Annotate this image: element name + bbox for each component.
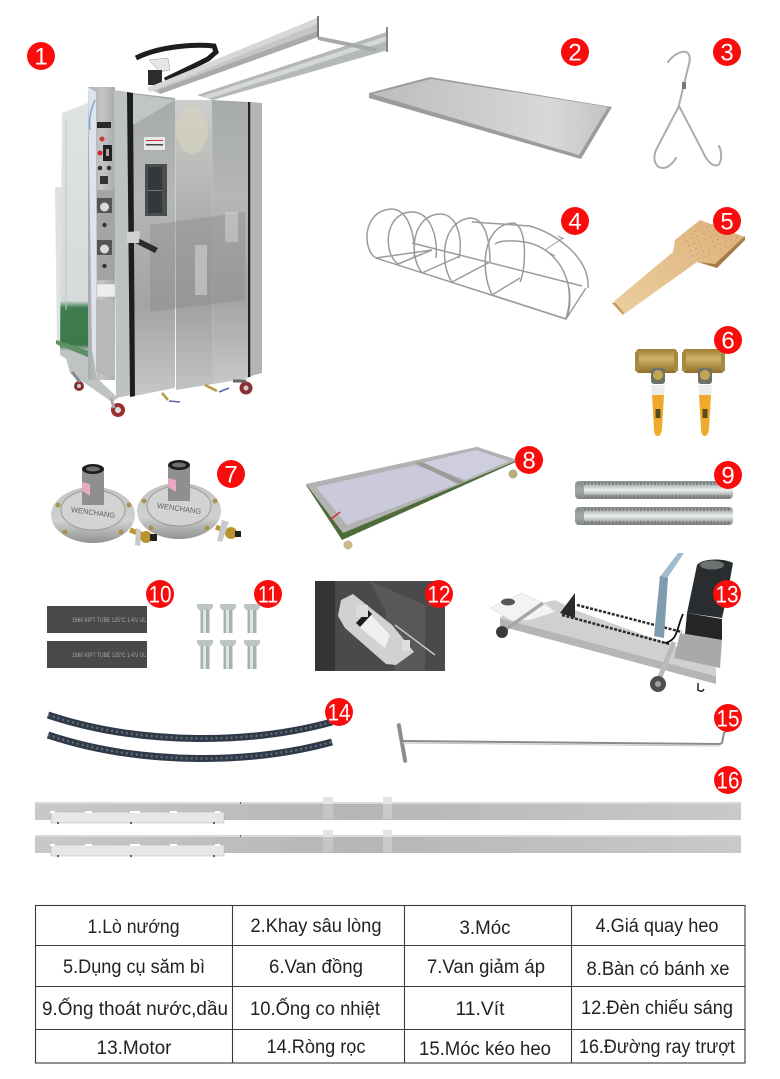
bolts: [197, 604, 260, 669]
parts legend table: 10.Ống co nhiệt: [250, 998, 381, 1020]
rotisserie cage: [367, 209, 588, 319]
control column: [88, 87, 115, 380]
lamp photo: [315, 581, 445, 671]
badge 15: 15: [716, 706, 740, 732]
badge 8: 8: [522, 448, 536, 474]
badge 16: 16: [716, 768, 740, 794]
badge 14: 14: [328, 700, 350, 726]
pressure regulators: [51, 460, 241, 546]
hook: [654, 52, 721, 168]
sliding rails: [35, 797, 741, 857]
motor assembly: [490, 553, 733, 692]
parts legend table: 5.Dụng cụ săm bì: [63, 957, 205, 978]
parts legend table: 15.Móc kéo heo: [419, 1039, 551, 1060]
badge 7: [217, 460, 245, 488]
parts legend table: 13.Motor: [96, 1038, 172, 1059]
badge 3: 3: [720, 40, 734, 66]
parts legend table: 6.Van đồng: [269, 957, 363, 978]
badge 9: 9: [721, 462, 735, 490]
parts legend table: 8.Bàn có bánh xe: [586, 959, 730, 980]
parts legend table: 3.Móc: [460, 918, 510, 939]
badge 3: [713, 38, 741, 66]
badge 4: [561, 207, 589, 236]
parts legend table: 7.Van giảm áp: [427, 957, 545, 978]
badge 10: 10: [148, 582, 172, 608]
oven handle: [133, 236, 158, 253]
casters: [74, 381, 84, 391]
badge 11: 11: [258, 582, 278, 608]
overhead rails: [136, 16, 388, 100]
badge 1: 1: [34, 44, 48, 70]
badge 6: 6: [721, 328, 735, 354]
badge 12: 12: [428, 582, 450, 608]
badge 8: [515, 446, 543, 474]
badge 2: 2: [568, 40, 582, 66]
oven doors: [133, 93, 175, 396]
pulling hook: [397, 723, 727, 763]
parts legend table: 2.Khay sâu lòng: [250, 916, 382, 937]
parts legend table: 9.Ống thoát nước,dầu: [42, 998, 228, 1020]
badge 5: [713, 207, 741, 236]
parts legend table: 11.Vít: [456, 999, 505, 1020]
number badges: [27, 38, 742, 794]
parts legend table: 4.Giá quay heo: [596, 916, 718, 937]
drag chains: [48, 715, 332, 758]
oven back panel: [55, 187, 63, 350]
oven illustration: [55, 16, 388, 417]
badge 5: 5: [720, 208, 734, 236]
heat-shrink tubes: [47, 606, 147, 668]
parts legend table: [35, 905, 745, 1063]
brush tool: [612, 220, 745, 315]
parts legend table: 12.Đèn chiếu sáng: [581, 998, 733, 1019]
threaded pipes: [575, 481, 733, 525]
parts legend table: 16.Đường ray trượt: [579, 1037, 736, 1058]
parts legend table: 14.Ròng rọc: [266, 1037, 366, 1058]
badge 7: 7: [224, 462, 238, 488]
parts legend table: 1.Lò nướng: [88, 917, 180, 938]
badge 9: [714, 461, 742, 490]
badge 1: [27, 42, 55, 70]
badge 13: 13: [716, 582, 738, 608]
wheeled table: [306, 447, 518, 550]
tray: [369, 77, 612, 159]
oven seam: [114, 90, 131, 398]
badge 6: [714, 326, 742, 354]
badge 4: 4: [568, 208, 582, 236]
brass valves: [635, 349, 725, 436]
badge 2: [561, 38, 589, 66]
